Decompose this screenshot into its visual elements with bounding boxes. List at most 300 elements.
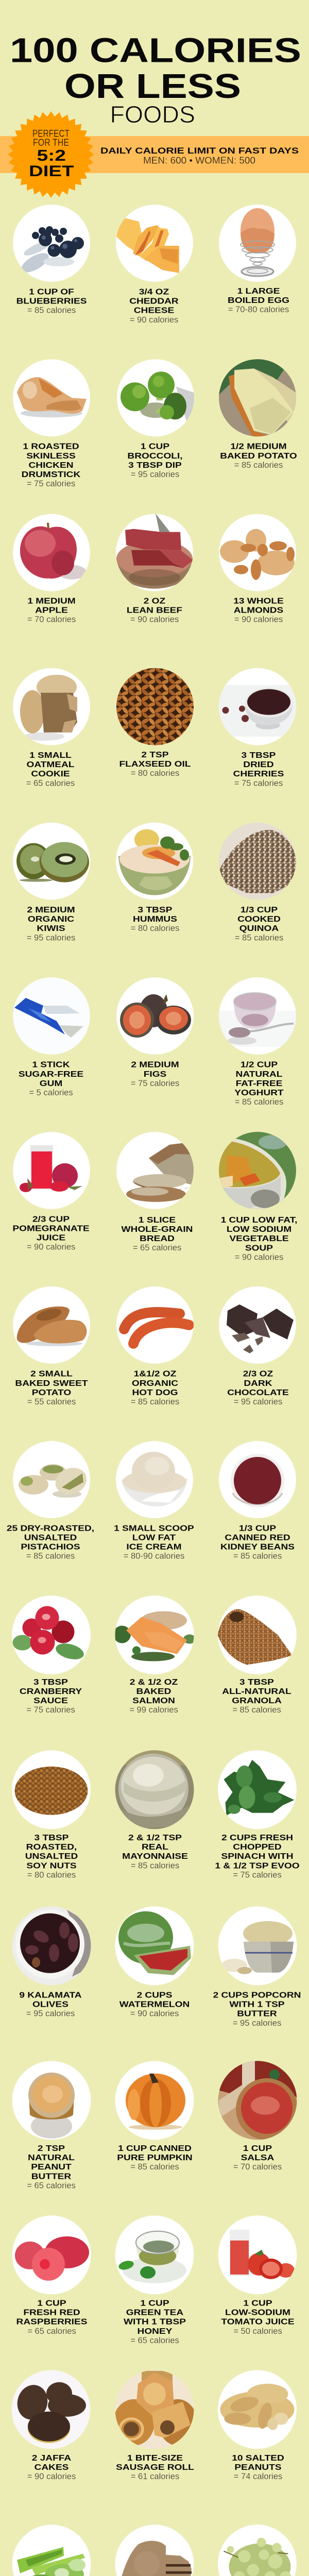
label: cheddar: CHEESE	[134, 306, 174, 315]
icon: figs	[116, 977, 194, 1055]
label: olives: OLIVES	[32, 1999, 68, 2009]
label: spinach	[215, 1833, 300, 1879]
banner: daily calorie limit	[0, 136, 309, 173]
label: vegetable soup: SOUP	[245, 1243, 273, 1252]
food: celery	[12, 2524, 91, 2576]
icon: granola	[217, 1596, 297, 1674]
label: flaxseed oil: 2 TSP	[141, 750, 169, 759]
icon: grapes	[218, 2524, 297, 2576]
icon: pomegranate juice	[13, 1132, 90, 1209]
food: raspberries	[12, 2215, 91, 2336]
food: pistachios	[7, 1441, 94, 1561]
label: spinach: 2 CUPS FRESH	[221, 1833, 293, 1842]
icon: tomato juice	[218, 2215, 297, 2294]
icon: blueberries	[13, 205, 90, 282]
label: salmon: SALMON	[132, 1696, 175, 1705]
label: jaffa cakes: CAKES	[35, 2463, 68, 2472]
label: lean beef: 2 OZ	[144, 596, 166, 605]
label: ice cream: = 80-90 calories	[124, 1551, 184, 1561]
label: sweet potato: 2 SMALL	[30, 1369, 73, 1378]
label: hummus: 3 TBSP	[138, 905, 173, 914]
label: baked potato: BAKED POTATO	[220, 451, 297, 460]
label: salsa: 1 CUP	[243, 2144, 272, 2153]
label: watermelon: 2 CUPS	[137, 1990, 172, 1999]
icon: hot dog	[116, 1286, 194, 1364]
label: vegetable soup: VEGETABLE	[229, 1234, 289, 1243]
label: figs: = 75 calories	[131, 1078, 179, 1088]
label: raspberries: RASPBERRIES	[16, 2317, 87, 2326]
food: kalamata olives	[12, 1906, 93, 2019]
label: sausage roll: SAUSAGE ROLL	[116, 2463, 194, 2472]
food: blueberries	[13, 205, 90, 315]
label: baked potato	[220, 442, 297, 470]
icon: lean beef	[115, 514, 194, 591]
label: peanut butter	[27, 2144, 76, 2190]
label: dried cherries: DRIED	[243, 760, 274, 769]
label: apple	[27, 596, 76, 624]
title	[10, 31, 301, 106]
label: yoghurt	[234, 1060, 284, 1107]
food: ice cream	[114, 1441, 194, 1561]
label: soy nuts: SOY NUTS	[26, 1861, 77, 1870]
label: flaxseed oil: FLAXSEED OIL	[119, 759, 191, 769]
label: sweet potato: = 55 calories	[27, 1397, 76, 1406]
icon: vegetable soup	[218, 1131, 297, 1210]
label: gum: SUGAR-FREE	[19, 1069, 83, 1078]
banner: daily calorie limit: DAILY CALORIE LIMIT ON FAST DAYS	[100, 146, 299, 156]
badge: perfect for the 5:2 diet	[8, 111, 94, 198]
food: drumstick	[13, 359, 90, 488]
label: granola: 3 TBSP	[239, 1677, 274, 1686]
label: yoghurt: NATURAL	[236, 1069, 283, 1078]
badge: perfect for the 5:2 diet: DIET	[29, 163, 74, 180]
icon: raspberries	[12, 2215, 91, 2294]
label: yoghurt: FAT-FREE	[236, 1078, 282, 1088]
label: oatmeal cookie: = 65 calories	[26, 778, 75, 788]
label: granola	[222, 1677, 291, 1715]
icon: cranberries	[12, 1596, 91, 1674]
icon: kidney beans	[219, 1441, 296, 1518]
label: oatmeal cookie: 1 SMALL	[29, 751, 72, 760]
label: flaxseed oil: = 80 calories	[131, 768, 179, 778]
label: peanut butter: NATURAL	[28, 2153, 75, 2162]
icon: dark chocolate	[219, 1286, 296, 1364]
label: drumstick: 1 ROASTED	[23, 442, 79, 451]
label: broccoli: BROCCOLI,	[127, 451, 183, 460]
label: drumstick: CHICKEN	[29, 460, 73, 470]
food: green tea	[115, 2215, 194, 2345]
badge: perfect for the 5:2 diet: 5:2	[37, 146, 66, 164]
label: vegetable soup: = 90 calories	[235, 1252, 283, 1262]
label: almonds: 13 WHOLE	[233, 596, 284, 605]
label: pistachios: = 85 calories	[26, 1551, 75, 1561]
icon: hummus	[116, 822, 193, 900]
label: watermelon: = 90 calories	[130, 2009, 179, 2019]
label: raspberries: 1 CUP	[37, 2298, 66, 2308]
label: peanut butter: PEANUT	[31, 2162, 72, 2172]
label: quinoa	[235, 905, 283, 942]
label: green tea: 1 CUP	[140, 2298, 169, 2308]
icon: sausage roll	[113, 2370, 197, 2449]
icon: ice cream	[116, 1441, 193, 1518]
label: pistachios: PISTACHIOS	[21, 1542, 80, 1551]
label: bread: 1 SLICE	[139, 1215, 176, 1225]
label: broccoli: 1 CUP	[141, 442, 169, 451]
label: jaffa cakes: 2 JAFFA	[32, 2453, 72, 2463]
label: hummus: = 80 calories	[131, 923, 179, 933]
label: gum: = 5 calories	[29, 1088, 73, 1097]
label: baked potato: 1/2 MEDIUM	[230, 442, 287, 451]
label: tomato juice: = 50 calories	[233, 2326, 282, 2336]
label: peanuts: PEANUTS	[234, 2463, 282, 2472]
label: egg: = 70-80 calories	[228, 304, 289, 314]
icon: yoghurt	[218, 977, 297, 1055]
label: cranberry sauce: 3 TBSP	[33, 1677, 68, 1686]
label: watermelon: WATERMELON	[119, 1999, 190, 2009]
label: spinach: CHOPPED	[233, 1842, 282, 1852]
food: lean beef	[115, 514, 194, 624]
label: broccoli	[127, 442, 183, 479]
label: watermelon	[119, 1990, 190, 2019]
label: popcorn: WITH 1 TSP	[229, 1999, 285, 2009]
label: egg: BOILED EGG	[228, 296, 289, 305]
label: peanuts: 10 SALTED	[232, 2453, 284, 2463]
food: cheddar	[115, 205, 193, 325]
label: peanut butter: BUTTER	[31, 2172, 72, 2181]
icon: peanut butter	[12, 2061, 91, 2140]
label: salmon: 2 & 1/2 OZ	[130, 1677, 178, 1686]
label: green tea	[124, 2298, 186, 2345]
food: hummus	[116, 822, 193, 933]
label: drumstick: SKINLESS	[26, 451, 76, 460]
label: apple: = 70 calories	[27, 615, 76, 624]
label: hummus: HUMMUS	[133, 914, 177, 924]
label: cheddar: 3/4 OZ	[139, 287, 169, 296]
food: granola	[217, 1596, 297, 1715]
icon: mayonnaise	[115, 1750, 194, 1829]
label: baked potato: = 85 calories	[234, 460, 283, 470]
icon: soy nuts	[12, 1750, 91, 1829]
label: quinoa: 1/3 CUP	[241, 905, 278, 914]
food: gum	[13, 977, 90, 1097]
label: dried cherries: 3 TBSP	[242, 751, 276, 760]
label: soy nuts: = 80 calories	[27, 1870, 76, 1879]
icon: olives	[12, 1906, 93, 1985]
label: pumpkin	[117, 2144, 193, 2172]
label: popcorn	[213, 1990, 301, 2028]
label: pistachios: 25 DRY-ROASTED,	[7, 1523, 94, 1533]
label: blueberries: BLUEBERRIES	[16, 296, 87, 306]
food: egg	[219, 205, 296, 314]
label: salsa: = 70 calories	[233, 2162, 282, 2172]
label: tomato juice	[221, 2298, 295, 2336]
label: olives: 9 KALAMATA	[19, 1990, 82, 1999]
icon: flaxseed	[116, 668, 194, 746]
label: granola: = 85 calories	[232, 1705, 281, 1715]
label: quinoa: QUINOA	[239, 924, 279, 933]
label: ice cream: LOW FAT	[132, 1533, 176, 1542]
label: ice cream: ICE CREAM	[126, 1542, 182, 1551]
label: apple: 1 MEDIUM	[27, 596, 76, 605]
label: tomato juice: LOW-SODIUM	[225, 2308, 290, 2317]
label: hot dog: ORGANIC	[132, 1378, 178, 1387]
label: peanuts: = 74 calories	[234, 2471, 282, 2481]
food: peanut butter	[12, 2061, 91, 2190]
food: cranberry sauce	[12, 1596, 91, 1715]
label: egg	[228, 286, 289, 314]
label: pistachios	[7, 1523, 94, 1561]
banner: daily calorie limit: MEN: 600 • WOMEN: 500	[143, 156, 255, 166]
label: mayonnaise	[122, 1833, 188, 1870]
label: ice cream	[114, 1523, 194, 1561]
label: dark chocolate: = 95 calories	[234, 1397, 282, 1406]
label: green tea: WITH 1 TBSP	[124, 2317, 186, 2326]
food: tomato juice	[218, 2215, 297, 2336]
icon: sweet potato	[13, 1286, 90, 1364]
food: salted peanuts	[218, 2370, 297, 2481]
label: kiwis: KIWIS	[37, 924, 65, 933]
icon: kiwis	[13, 822, 90, 900]
label: pomegranate juice: 2/3 CUP	[32, 1214, 70, 1224]
label: salmon: = 99 calories	[129, 1705, 178, 1715]
food: mayonnaise	[115, 1750, 194, 1870]
label: kidney beans: 1/3 CUP	[239, 1523, 276, 1533]
label: granola: ALL-NATURAL	[222, 1686, 291, 1696]
label: dark chocolate: 2/3 OZ	[243, 1369, 273, 1378]
label: lean beef	[127, 596, 182, 624]
label: kidney beans	[220, 1523, 295, 1561]
label: mayonnaise: = 85 calories	[131, 1860, 179, 1870]
label: kiwis: ORGANIC	[28, 914, 74, 924]
icon: spinach	[218, 1750, 297, 1829]
food: vegetable soup	[218, 1131, 297, 1262]
label: kiwis: = 95 calories	[27, 933, 75, 942]
label: green tea: HONEY	[138, 2326, 173, 2335]
label: pomegranate juice: POMEGRANATE	[12, 1224, 90, 1233]
label: mayonnaise: MAYONNAISE	[122, 1852, 188, 1861]
food: pomegranate juice	[12, 1132, 90, 1252]
label: peanut butter: = 65 calories	[27, 2180, 76, 2190]
food: soy nuts	[12, 1750, 91, 1879]
badge: perfect for the 5:2 diet: PERFECT	[32, 129, 70, 140]
label: raspberries: = 65 calories	[27, 2326, 76, 2336]
label: soy nuts: UNSALTED	[25, 1852, 78, 1861]
label: oatmeal cookie	[26, 751, 75, 788]
food: flaxseed oil	[116, 668, 194, 778]
label: figs: 2 MEDIUM	[131, 1060, 179, 1069]
food: jaffa cakes	[11, 2370, 91, 2481]
food: sweet potato	[13, 1286, 90, 1406]
label: cranberry sauce: = 75 calories	[26, 1705, 75, 1715]
label: peanuts	[232, 2453, 284, 2481]
label: vegetable soup: LOW SODIUM	[227, 1225, 291, 1234]
label: dried cherries	[233, 751, 284, 788]
label: hot dog: 1&1/2 OZ	[134, 1369, 177, 1378]
label: pistachios: UNSALTED	[24, 1533, 77, 1542]
icon: green tea	[115, 2215, 194, 2294]
label: tomato juice: TOMATO JUICE	[221, 2317, 295, 2326]
label: dark chocolate: CHOCOLATE	[227, 1387, 289, 1397]
icon: whole-grain bread	[116, 1132, 194, 1209]
label: broccoli: = 95 calories	[131, 469, 179, 479]
label: raspberries: FRESH RED	[23, 2308, 80, 2317]
icon: almonds	[219, 514, 296, 591]
label: cranberry sauce: CRANBERRY	[20, 1686, 82, 1696]
icon: apple	[13, 514, 90, 591]
label: yoghurt: = 85 calories	[235, 1097, 283, 1107]
label: popcorn: 2 CUPS POPCORN	[213, 1990, 301, 1999]
food: dried cherries	[218, 668, 297, 788]
icon: popcorn	[218, 1906, 297, 1985]
title: 100 CALORIES	[10, 31, 301, 70]
label: drumstick: = 75 calories	[27, 479, 75, 488]
icon: cheddar cheese	[115, 205, 193, 282]
label: pumpkin: PURE PUMPKIN	[117, 2153, 193, 2162]
icon: jaffa cakes	[11, 2370, 91, 2449]
subtitle: foods: FOODS	[110, 101, 195, 128]
food: baked potato	[218, 359, 297, 470]
icon: broccoli	[117, 359, 194, 436]
label: jaffa cakes: = 90 calories	[27, 2471, 76, 2481]
label: pomegranate juice: = 90 calories	[27, 1242, 75, 1252]
label: blueberries	[16, 287, 87, 315]
label: jaffa cakes	[27, 2453, 76, 2481]
label: figs: FIGS	[144, 1069, 166, 1078]
icon: pistachios	[13, 1441, 91, 1518]
label: yoghurt: 1/2 CUP	[241, 1060, 278, 1069]
label: salsa: SALSA	[241, 2153, 274, 2162]
food: broccoli	[117, 359, 194, 479]
label: pomegranate juice	[12, 1214, 90, 1252]
label: green tea: = 65 calories	[130, 2335, 179, 2345]
food: baked salmon	[113, 1596, 196, 1715]
label: hummus	[131, 905, 179, 933]
food: apple	[13, 514, 90, 624]
label: bread	[122, 1215, 193, 1252]
label: oatmeal cookie: OATMEAL	[26, 760, 75, 769]
label: hot dog	[131, 1369, 179, 1406]
label: mayonnaise: 2 & 1/2 TSP	[128, 1833, 182, 1842]
label: lean beef: LEAN BEEF	[127, 605, 182, 615]
label: drumstick	[22, 442, 81, 488]
food: oatcakes	[115, 2524, 194, 2576]
icon: chicken drumstick	[13, 359, 90, 436]
label: apple: APPLE	[35, 605, 68, 615]
food: dark chocolate	[219, 1286, 296, 1406]
label: oatmeal cookie: COOKIE	[31, 769, 70, 778]
food: sausage roll	[113, 2370, 197, 2481]
food: spinach	[215, 1750, 300, 1879]
icon: salmon	[113, 1596, 196, 1674]
label: salsa	[233, 2144, 282, 2172]
label: spinach: SPINACH WITH	[221, 1852, 294, 1861]
label: kidney beans: KIDNEY BEANS	[220, 1542, 295, 1551]
label: drumstick: DRUMSTICK	[22, 470, 81, 479]
label: pumpkin: = 85 calories	[130, 2162, 179, 2172]
label: soy nuts	[25, 1833, 78, 1879]
label: bread: BREAD	[140, 1234, 175, 1243]
label: sweet potato: POTATO	[32, 1387, 71, 1397]
food: bread	[116, 1132, 194, 1252]
icon: oatcakes	[115, 2524, 194, 2576]
label: hot dog: = 85 calories	[131, 1397, 179, 1406]
label: soy nuts: ROASTED,	[26, 1842, 77, 1852]
label: dark chocolate: DARK	[244, 1378, 272, 1387]
label: raspberries	[16, 2298, 87, 2336]
label: quinoa: = 85 calories	[235, 933, 283, 942]
label: broccoli: 3 TBSP DIP	[128, 460, 182, 470]
label: blueberries: = 85 calories	[27, 306, 76, 315]
label: vegetable soup	[221, 1215, 297, 1262]
label: hot dog: HOT DOG	[132, 1387, 178, 1397]
icon: watermelon	[115, 1906, 194, 1985]
label: figs	[131, 1060, 179, 1088]
food: kidney beans	[219, 1441, 296, 1561]
food: popcorn	[213, 1906, 301, 2028]
label: popcorn: = 95 calories	[233, 2018, 281, 2028]
label: pomegranate juice: JUICE	[37, 1233, 65, 1242]
label: egg: 1 LARGE	[237, 286, 280, 296]
label: bread: = 65 calories	[133, 1243, 181, 1252]
label: spinach: 1 & 1/2 TSP EVOO	[215, 1861, 300, 1870]
label: salmon	[129, 1677, 178, 1715]
label: olives: = 95 calories	[26, 2009, 75, 2019]
badge: perfect for the 5:2 diet: FOR THE	[33, 138, 69, 148]
label: kiwis: 2 MEDIUM	[27, 905, 75, 914]
food: figs	[116, 977, 194, 1088]
label: sweet potato: BAKED SWEET	[15, 1378, 88, 1387]
label: spinach: = 75 calories	[233, 1870, 282, 1879]
label: cranberry sauce: SAUCE	[33, 1696, 68, 1705]
title: OR LESS	[64, 67, 241, 106]
food: oatmeal cookie	[13, 668, 90, 788]
label: dried cherries: = 75 calories	[234, 778, 283, 788]
label: cheddar: CHEDDAR	[129, 296, 179, 306]
label: gum	[19, 1060, 83, 1097]
icon: baked potato	[218, 359, 297, 437]
label: pumpkin: 1 CUP CANNED	[118, 2144, 192, 2153]
food: almonds	[219, 514, 296, 624]
label: dark chocolate	[227, 1369, 289, 1406]
icon: celery	[12, 2524, 91, 2576]
label: sausage roll: = 61 calories	[131, 2471, 179, 2481]
food: hot dog	[116, 1286, 194, 1406]
label: lean beef: = 90 calories	[130, 615, 179, 624]
icon: quinoa	[218, 822, 297, 900]
label: kiwis	[27, 905, 75, 942]
label: kidney beans: CANNED RED	[225, 1533, 290, 1542]
label: cheddar	[129, 287, 179, 325]
label: yoghurt: YOGHURT	[234, 1088, 284, 1097]
label: granola: GRANOLA	[232, 1696, 282, 1705]
label: almonds: ALMONDS	[234, 605, 283, 615]
label: sausage roll: 1 BITE-SIZE	[127, 2453, 183, 2463]
label: quinoa: COOKED	[237, 914, 281, 924]
label: sausage roll	[116, 2453, 194, 2481]
icon: dried cherries	[218, 668, 297, 745]
food: yoghurt	[218, 977, 297, 1107]
label: gum: 1 STICK	[32, 1060, 70, 1069]
icon: sugar-free gum	[13, 977, 90, 1055]
food: pumpkin	[115, 2061, 194, 2172]
label: popcorn: BUTTER	[237, 2009, 277, 2018]
label: sweet potato	[15, 1369, 88, 1406]
label: salmon: BAKED	[136, 1686, 171, 1696]
label: mayonnaise: REAL	[142, 1842, 168, 1852]
food: quinoa	[218, 822, 297, 942]
label: ice cream: 1 SMALL SCOOP	[114, 1523, 194, 1533]
food: kiwis	[13, 822, 90, 942]
